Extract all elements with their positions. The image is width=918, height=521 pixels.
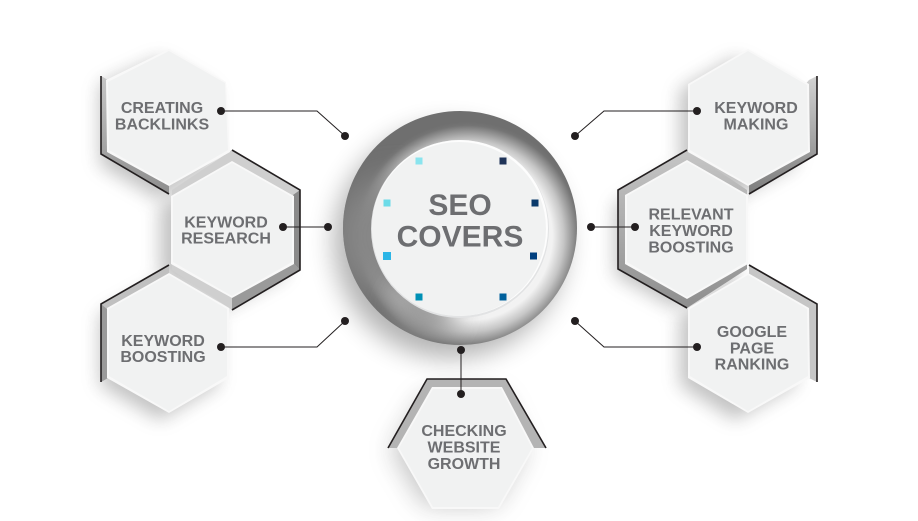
soft shadows behind the hexagons [100,58,795,505]
title: SEO [428,189,492,222]
label: checking website growth: CHECKING [421,423,507,440]
label: google page ranking: PAGE [730,340,774,358]
inner disc [371,140,549,318]
hexagon: keyword boosting [101,265,229,413]
title: COVERS [397,220,523,254]
connector: keyword making [571,107,701,140]
label: keyword boosting: KEYWORD [121,333,205,350]
clock markers [383,158,538,300]
label: relevant keyword boosting: RELEVANT [648,206,734,224]
label: keyword making: KEYWORD [714,100,798,117]
central circle [336,111,577,345]
connector: google page ranking [571,317,701,351]
label: creating backlinks: BACKLINKS [115,116,209,134]
hexagon: keyword making [688,49,817,194]
hexagon: google page ranking [688,265,817,413]
label: relevant keyword boosting: BOOSTING [648,240,734,256]
outer ring [336,111,577,345]
hexagon: relevant keyword boosting [618,150,748,308]
label: relevant keyword boosting: KEYWORD [649,223,733,240]
circle drop shadow [334,126,566,358]
label: google page ranking: GOOGLE [717,324,787,341]
label: google page ranking: RANKING [715,356,789,374]
hexagon: keyword research [171,150,300,310]
connector: relevant keyword boosting [587,223,639,231]
connector: keyword research [279,223,332,231]
connector: keyword boosting [217,317,349,351]
label: creating backlinks: CREATING [121,100,203,117]
label: checking website growth: WEBSITE [428,440,501,456]
connector: creating backlinks [217,107,349,140]
label: checking website growth: GROWTH [428,456,500,473]
label: keyword research: RESEARCH [181,230,271,248]
label: keyword boosting: BOOSTING [120,349,206,366]
hexagon: checking website growth [388,379,546,509]
connector: checking website growth [457,346,465,398]
label: keyword making: MAKING [724,116,788,134]
label: keyword research: KEYWORD [184,214,268,232]
hexagon: creating backlinks [101,49,230,194]
